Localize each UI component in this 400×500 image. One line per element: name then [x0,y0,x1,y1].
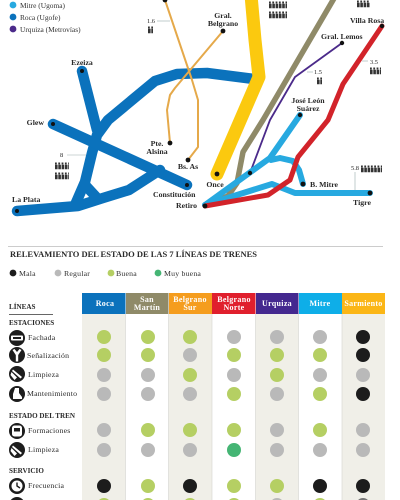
table header: rail lines: San [140,295,154,304]
rating dots: Roca [97,330,111,500]
passenger figures and values: 1.6 [147,18,155,25]
table header: rail lines: Martín [134,303,160,312]
passenger figures and values: 8 [60,152,63,159]
legend: ratings: Regular [64,269,90,278]
station labels: Constitución [153,190,196,199]
line: Belgrano Norte [205,26,382,206]
legend: ratings: Buena [116,269,137,278]
line: Mitre [205,115,370,205]
station labels: Bs. As [178,162,198,171]
station labels: Once [206,180,224,189]
passenger figures and values: 1.5 [314,69,322,76]
station labels: Pte. [151,139,163,148]
legend: railway operators: Roca (Ugofe) [20,13,61,22]
line: San Martín [205,0,336,205]
station labels: José León [291,96,325,105]
table column backgrounds [82,314,385,500]
divider [8,246,383,248]
station labels: Ezeiza [71,58,93,67]
table header: rail lines: Belgrano [217,295,251,304]
station labels: Villa Rosa [350,16,384,25]
rating dots: Belgrano Sur [183,330,197,500]
table header: rail lines: Urquiza [262,299,292,308]
station labels: Alsina [146,147,168,156]
table header: rail lines: Sur [183,303,197,312]
line: Sarmiento [217,0,259,174]
legend: ratings: Muy buena [164,269,201,278]
row labels and icons: Formaciones [28,426,70,435]
station labels [12,11,384,210]
row labels and icons: LÍNEAS [9,303,35,311]
row labels and icons: SERVICIO [9,467,44,475]
row labels and icons: Limpieza [28,445,59,454]
legend: ratings [10,269,201,278]
line: Urquiza [250,43,342,173]
station labels: Glew [27,118,44,127]
passenger figures and values: 3.5 [370,59,378,66]
row labels and icons: Fachada [28,333,56,342]
station labels: Tigre [353,198,371,207]
line: Roca [17,71,254,211]
station labels: Belgrano [208,19,238,28]
rating dots: Mitre [313,330,327,500]
row labels and icons: Señalización [27,351,69,360]
station labels: Gral. Lemos [321,32,363,41]
rating dots: San Martín [141,330,155,500]
line: Belgrano Sur [165,0,223,160]
station labels: Gral. [214,11,232,20]
legend: ratings: Mala [19,269,36,278]
table header: rail lines [82,293,385,314]
section title: RELEVAMIENTO DEL ESTADO DE LAS 7 LÍNEAS DE TRENES [10,249,257,259]
passenger figures and values: 5.8 [351,165,359,172]
station labels: Suárez [297,104,320,113]
table header: rail lines: Norte [223,303,245,312]
row labels and icons: Mantenimiento [27,389,77,398]
passenger figures and values [55,2,382,190]
station markers [15,0,384,213]
station labels: B. Mitre [310,180,339,189]
rating dots: Urquiza [270,330,284,500]
row labels and icons [9,303,77,500]
row labels and icons: Limpieza [28,370,59,379]
table header: rail lines: Mitre [310,299,331,308]
station labels: La Plata [12,195,40,204]
station labels: Retiro [176,201,197,210]
row labels and icons: ESTADO DEL TREN [9,412,76,420]
table header: rail lines: Sarmiento [344,299,383,308]
table header: rail lines: Belgrano [173,295,207,304]
row labels and icons: ESTACIONES [9,319,54,327]
legend: railway operators [10,1,81,34]
legend: railway operators: Mitre (Ugoma) [20,1,65,10]
row labels and icons: Frecuencia [28,481,65,490]
table header: rail lines: Roca [96,299,114,308]
map: train network [12,0,384,213]
rating dots: Belgrano Norte [227,330,241,500]
rating dots: Sarmiento [356,330,370,500]
legend: railway operators: Urquiza (Metrovías) [20,25,81,34]
